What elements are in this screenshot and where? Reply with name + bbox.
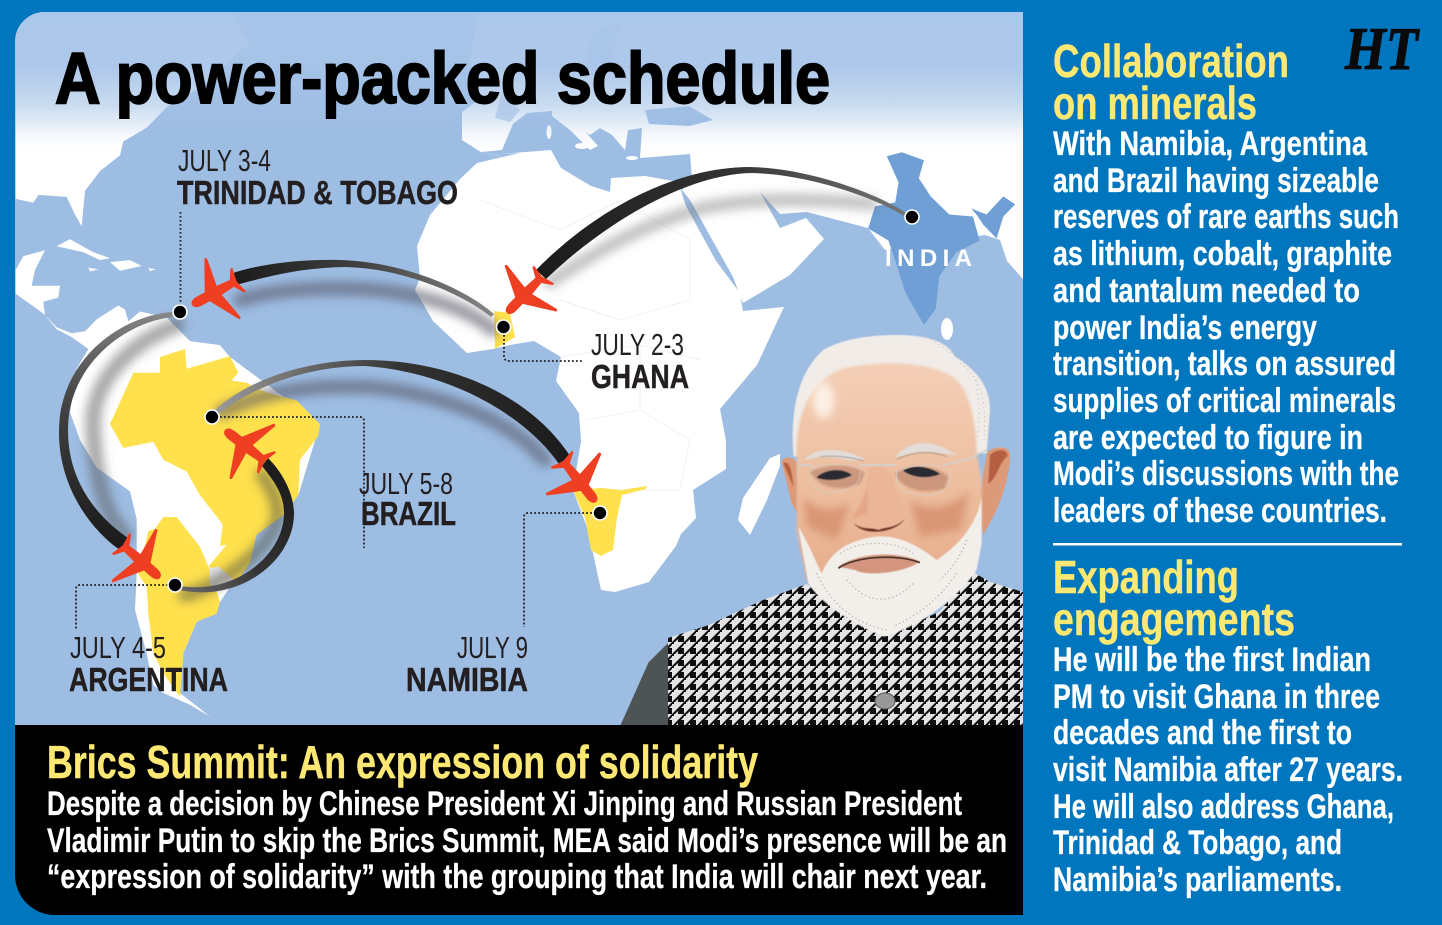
planes (112, 258, 602, 592)
arc: Trinidad to Argentina (59, 312, 173, 550)
map: Madagascar (738, 454, 780, 535)
text: engagements body: Trinidad & Tobago, and (1053, 824, 1342, 862)
dotted leader lines (76, 212, 592, 630)
heading: solidarity: Brics Summit: An expression of solidarity (47, 736, 758, 788)
heading: minerals: on minerals (1053, 77, 1257, 129)
map: African borders (480, 200, 700, 490)
mouth line (838, 557, 920, 568)
map: Paraguay (204, 524, 223, 548)
text: solidarity body: Vladimir Putin to skip the Brics Summit, MEA said Modi’s presence will be an (47, 822, 1007, 860)
label: Trinidad and Tobago: JULY 3-4 (178, 143, 271, 178)
logo: HT: HT (1344, 16, 1420, 82)
coat button (875, 693, 895, 709)
eyes (817, 467, 940, 480)
label: Brazil: JULY 5-8 (359, 466, 453, 501)
label: Argentina: JULY 4-5 (70, 630, 166, 665)
ears (782, 447, 1010, 535)
beard shading (817, 540, 967, 630)
nose (852, 467, 907, 532)
face (797, 363, 982, 633)
text: minerals body: power India’s energy (1053, 309, 1317, 347)
plane: Ghana (504, 264, 558, 314)
arc: Ghana to Trinidad (233, 260, 494, 317)
text: solidarity body: Despite a decision by Chinese President Xi Jinping and Russian President (47, 785, 962, 823)
label: Namibia (406, 630, 528, 698)
label: Brazil: BRAZIL (361, 495, 456, 532)
text: engagements body: Namibia’s parliaments. (1053, 861, 1342, 899)
label: Namibia: JULY 9 (457, 630, 528, 665)
arc: India to Ghana (536, 167, 906, 279)
heading: engagements: engagements (1053, 593, 1295, 645)
label: Trinidad and Tobago (177, 143, 458, 211)
label: Namibia: NAMIBIA (406, 661, 528, 698)
portrait (620, 335, 1023, 726)
map: Italy and Mediterranean islands (546, 106, 638, 160)
plane: Brazil (224, 424, 276, 479)
text: engagements body: decades and the first to (1053, 714, 1352, 752)
route shadows (93, 200, 872, 595)
label: Argentina (69, 630, 228, 698)
forehead highlight (813, 382, 834, 418)
brow shading (820, 452, 947, 461)
map: Brazil (110, 349, 320, 582)
text: engagements body (1053, 641, 1403, 899)
map: Eurasia (462, 68, 1023, 303)
heading: minerals (1053, 35, 1289, 129)
location dots (168, 210, 919, 592)
heading: engagements (1053, 551, 1295, 645)
panel: solidarity (15, 725, 1023, 915)
arc: Brazil to Namibia (215, 360, 570, 464)
head (782, 335, 1010, 637)
inner ears (783, 450, 1007, 487)
map: India and neighbours (868, 152, 1015, 325)
map: top fade (15, 12, 1023, 150)
arc: Argentina to Brazil (180, 458, 294, 592)
text: minerals body: are expected to figure in (1053, 419, 1363, 457)
eyebrows (803, 443, 957, 461)
heading: minerals: Collaboration (1053, 35, 1289, 87)
cheek shading (803, 490, 970, 540)
label: India: INDIA (885, 245, 972, 272)
map: Americas (16, 12, 320, 717)
map: Uruguay (209, 566, 236, 592)
label: Ghana: GHANA (591, 358, 689, 395)
plane: Trinidad (192, 258, 246, 320)
title: A power-packed schedule (55, 39, 830, 119)
text: minerals body: and tantalum needed to (1053, 272, 1360, 310)
text: solidarity body: “expression of solidarity” with the grouping that India will chair next year. (47, 858, 987, 896)
text: solidarity body (47, 785, 1007, 896)
map: Sri Lanka (941, 318, 953, 340)
label: Ghana (591, 327, 689, 395)
map: Africa (415, 150, 784, 592)
text: minerals body: With Namibia, Argentina (1053, 125, 1368, 163)
panel: map (15, 12, 1023, 726)
map: Argentina (138, 517, 220, 697)
map: Mediterranean and seas (482, 92, 713, 180)
eye shadows (810, 465, 948, 491)
heading: engagements: Expanding (1053, 551, 1239, 603)
label: Argentina: ARGENTINA (69, 661, 228, 698)
map: Namibia (573, 486, 647, 556)
text: minerals body (1053, 125, 1399, 530)
plane: Argentina (112, 528, 161, 582)
label: Ghana: JULY 2-3 (591, 327, 684, 362)
plane: Namibia (546, 450, 602, 503)
hair speckle (927, 337, 985, 440)
panel: engagements (1053, 551, 1403, 899)
text: engagements body: He will be the first Indian (1053, 641, 1371, 679)
glasses (800, 450, 987, 495)
route arcs (59, 167, 906, 592)
hair (793, 335, 990, 457)
jacket (620, 642, 669, 726)
label: Trinidad and Tobago: TRINIDAD & TOBAGO (177, 174, 458, 211)
lips (838, 555, 920, 573)
label: Brazil (359, 466, 456, 532)
panel: minerals (1053, 35, 1399, 530)
beard (798, 497, 982, 637)
map labels (69, 143, 972, 698)
map: Ghana (494, 311, 515, 349)
